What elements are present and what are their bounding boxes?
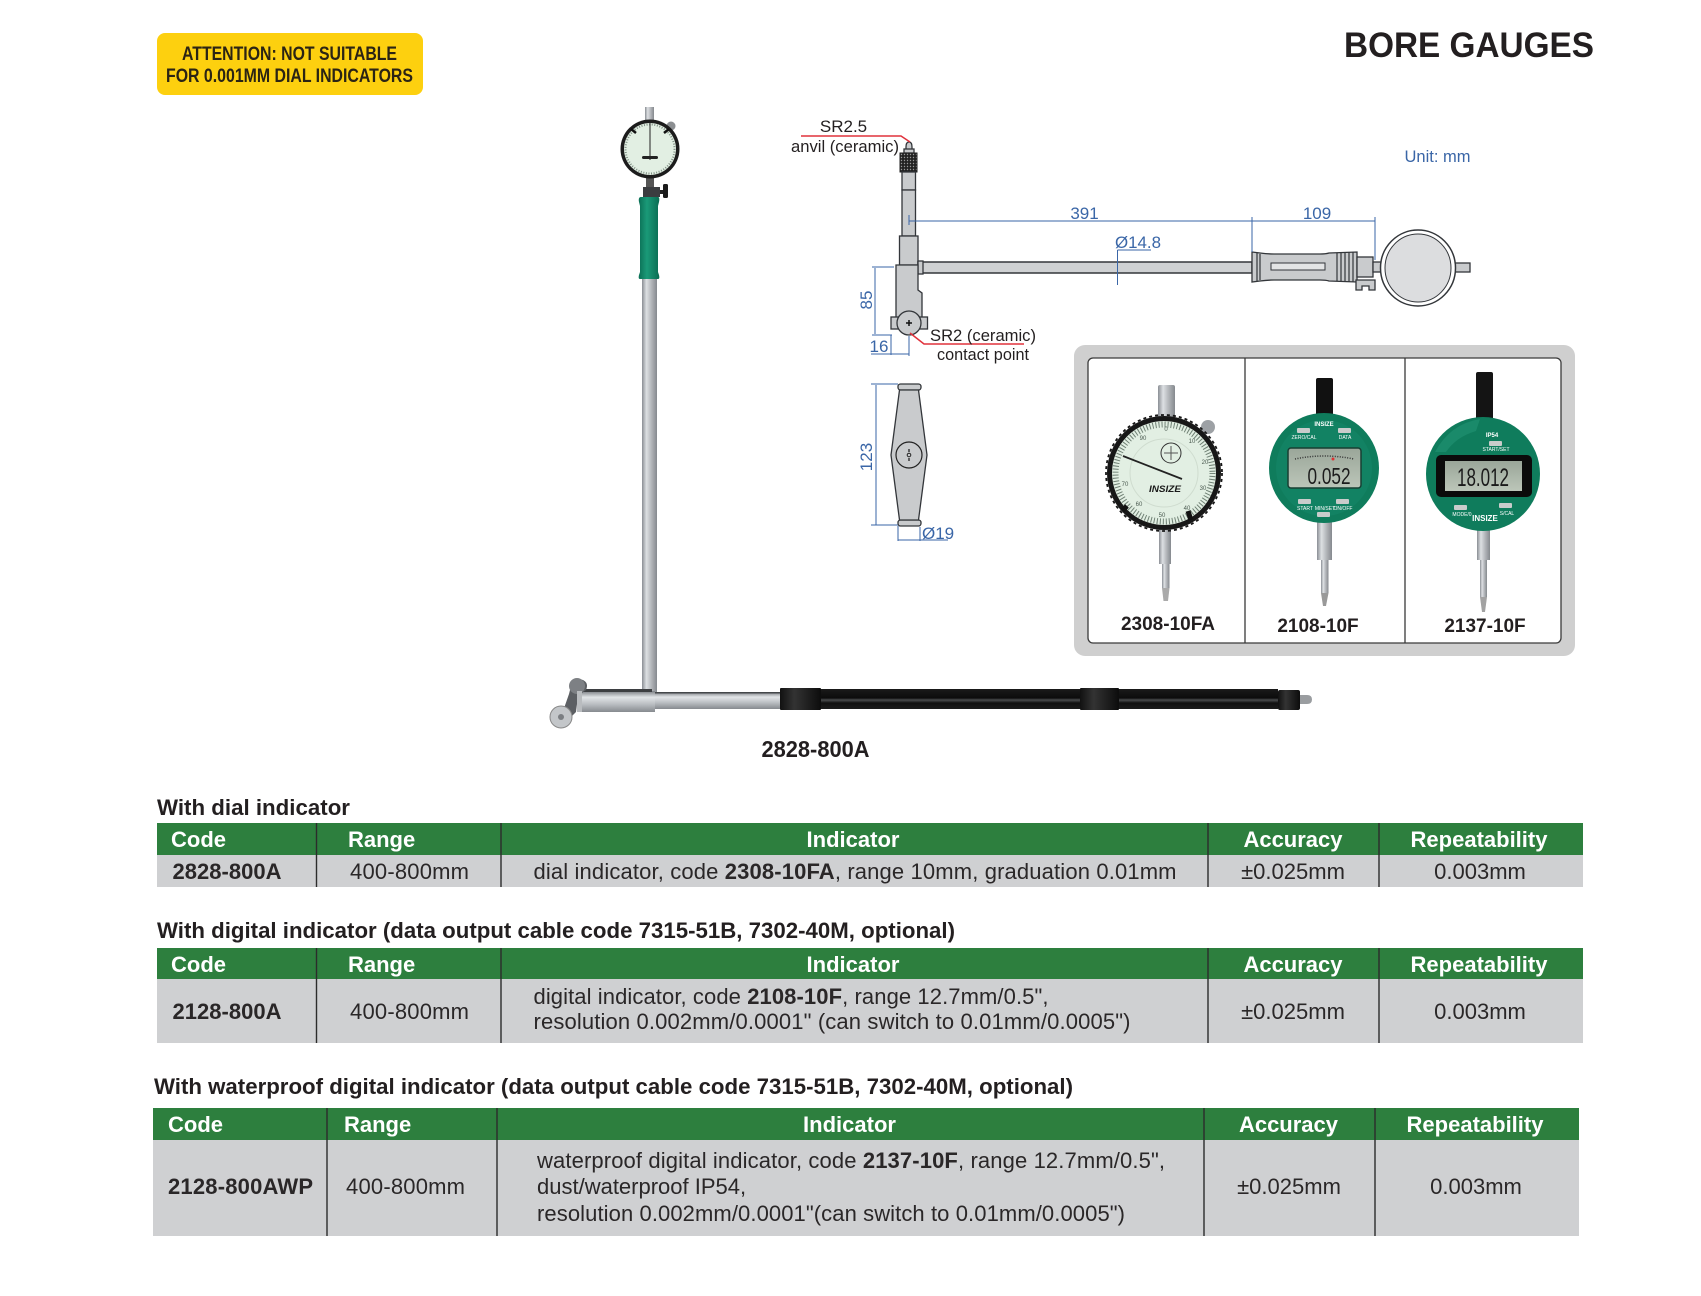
header row — [171, 952, 1548, 977]
icon: dial indicator 2308-10FA — [1106, 385, 1222, 601]
icon: waterproof digital indicator 2137-10F: INSIZE — [1472, 514, 1499, 523]
icon: dial indicator 2308-10FA: 30 — [1200, 486, 1207, 492]
icon: waterproof digital indicator 2137-10F: S/CAL — [1500, 511, 1514, 517]
callout: anvil: SR2.5 — [820, 117, 867, 136]
photo: bore gauge 2828-800A — [550, 107, 1312, 728]
technical drawing: side view — [791, 117, 1470, 364]
header row: Range — [344, 1112, 411, 1137]
header row: Code — [168, 1112, 223, 1137]
icon: waterproof digital indicator 2137-10F: START/SET — [1482, 447, 1510, 453]
data row: 400-800mm — [350, 859, 469, 884]
label: 2828-800A: 2828-800A — [762, 736, 870, 762]
header row: Range — [348, 827, 415, 852]
logo: INSIZE: INSIZE — [1149, 484, 1182, 494]
data row: 2828-800A — [172, 859, 282, 884]
data row: dial indicator, code 2308-10FA, range 10mm, graduation 0.01mm — [534, 859, 1176, 884]
icon: digital indicator 2108-10F: INSIZE — [1314, 422, 1334, 428]
dimension: 391: 391 — [1070, 204, 1099, 223]
data row: 0.003mm — [1434, 999, 1526, 1024]
header row: Accuracy — [1243, 827, 1343, 852]
callout: contact point: contact point — [937, 345, 1029, 364]
icon: digital indicator 2108-10F: START — [1297, 506, 1313, 512]
table: digital indicator — [157, 948, 1583, 1043]
dimension: 85: 85 — [857, 291, 876, 309]
data row — [172, 859, 1526, 884]
data row — [172, 984, 1526, 1034]
data row — [168, 1148, 1522, 1226]
table: waterproof digital indicator — [153, 1108, 1579, 1236]
callout: anvil — [791, 117, 910, 156]
header row: Repeatability — [1407, 1112, 1544, 1137]
icon: waterproof digital indicator 2137-10F — [1426, 372, 1540, 612]
data row: dust/waterproof IP54, — [537, 1174, 746, 1199]
dimension: 109: 109 — [1303, 204, 1331, 223]
warning badge — [157, 33, 423, 95]
icon: waterproof digital indicator 2137-10F: IP54 — [1486, 433, 1499, 439]
icon: digital indicator 2108-10F: DATA — [1339, 435, 1352, 441]
data row: resolution 0.002mm/0.0001"(can switch to 0.01mm/0.0005") — [537, 1201, 1125, 1226]
icon: dial indicator 2308-10FA: 90 — [1140, 436, 1147, 442]
label: unit: Unit: mm — [1404, 147, 1470, 166]
callout: contact point — [910, 326, 1036, 364]
icon: dial indicator 2308-10FA: 20 — [1202, 460, 1209, 466]
icon: digital indicator 2108-10F: MIN/SET — [1315, 506, 1335, 512]
data row: ±0.025mm — [1241, 859, 1345, 884]
header row: Accuracy — [1243, 952, 1343, 977]
callout: anvil: anvil (ceramic) — [791, 137, 899, 156]
warning badge: FOR 0.001MM DIAL INDICATORS — [166, 66, 413, 87]
label: 2308-10FA: 2308-10FA — [1121, 614, 1215, 635]
dimension: 16: 16 — [870, 337, 888, 356]
table: dial indicator — [157, 823, 1583, 887]
data row: 2128-800AWP — [168, 1174, 313, 1199]
label: 2137-10F: 2137-10F — [1444, 616, 1526, 637]
data row: digital indicator, code 2108-10F, range 12.7mm/0.5", — [534, 984, 1048, 1009]
callout: contact point: SR2 (ceramic) — [930, 326, 1036, 345]
icon: dial indicator 2308-10FA: 50 — [1159, 513, 1166, 519]
icon: waterproof digital indicator 2137-10F: MODE/0 — [1452, 512, 1472, 518]
data row: resolution 0.002mm/0.0001" (can switch to 0.01mm/0.0005") — [534, 1009, 1130, 1034]
data row: 400-800mm — [350, 999, 469, 1024]
heading: with dial indicator: With dial indicator — [157, 795, 350, 820]
data row: 0.003mm — [1434, 859, 1526, 884]
icon: dial indicator 2308-10FA: 10 — [1189, 439, 1196, 445]
header row: Repeatability — [1411, 827, 1548, 852]
icon: digital indicator 2108-10F: ON/OFF — [1334, 506, 1352, 512]
data row: 2128-800A — [172, 999, 282, 1024]
label: 2108-10F: 2108-10F — [1277, 616, 1359, 637]
header row: Indicator — [807, 827, 900, 852]
icon: dial indicator 2308-10FA: 60 — [1136, 502, 1143, 508]
dimension: diameter 14.8: Ø14.8 — [1115, 233, 1161, 252]
data row: waterproof digital indicator, code 2137-10F, range 12.7mm/0.5", — [536, 1148, 1165, 1173]
data row: 400-800mm — [346, 1174, 465, 1199]
icon: digital indicator 2108-10F: ZERO/CAL — [1291, 435, 1317, 441]
header row: Range — [348, 952, 415, 977]
header row: Accuracy — [1239, 1112, 1339, 1137]
header row: Indicator — [803, 1112, 896, 1137]
data row: ±0.025mm — [1241, 999, 1345, 1024]
dimension lines — [871, 215, 1375, 356]
data row: 0.003mm — [1430, 1174, 1522, 1199]
icon: dial indicator 2308-10FA: 40 — [1184, 506, 1191, 512]
panel: indicator options — [1074, 345, 1575, 656]
icon: waterproof digital indicator 2137-10F: 18.012 — [1457, 464, 1509, 492]
header row: Code — [171, 827, 226, 852]
icon: dial indicator 2308-10FA: 0 — [1164, 427, 1168, 433]
icon: digital indicator 2108-10F — [1269, 378, 1379, 606]
header row — [171, 827, 1548, 852]
header row: Code — [171, 952, 226, 977]
warning badge: ATTENTION: NOT SUITABLE — [182, 44, 397, 65]
header row: Repeatability — [1411, 952, 1548, 977]
gauge outline — [891, 142, 1470, 335]
data row: ±0.025mm — [1237, 1174, 1341, 1199]
icon: digital indicator 2108-10F: 0.052 — [1308, 463, 1350, 489]
icon: dial indicator 2308-10FA: 70 — [1122, 482, 1129, 488]
dimension: 123: 123 — [857, 443, 876, 471]
technical drawing: handle cross-section — [857, 384, 954, 543]
heading: with digital indicator: With digital indicator (data output cable code 7315-51B, 7302-40M, optional) — [157, 918, 955, 943]
title: BORE GAUGES — [1344, 25, 1594, 65]
header row: Indicator — [807, 952, 900, 977]
header row — [168, 1112, 1544, 1137]
heading: with waterproof digital indicator: With waterproof digital indicator (data output cable code 7315-51B, 7302-40M, optional) — [154, 1074, 1073, 1099]
dimension: diameter 19: Ø19 — [922, 524, 954, 543]
